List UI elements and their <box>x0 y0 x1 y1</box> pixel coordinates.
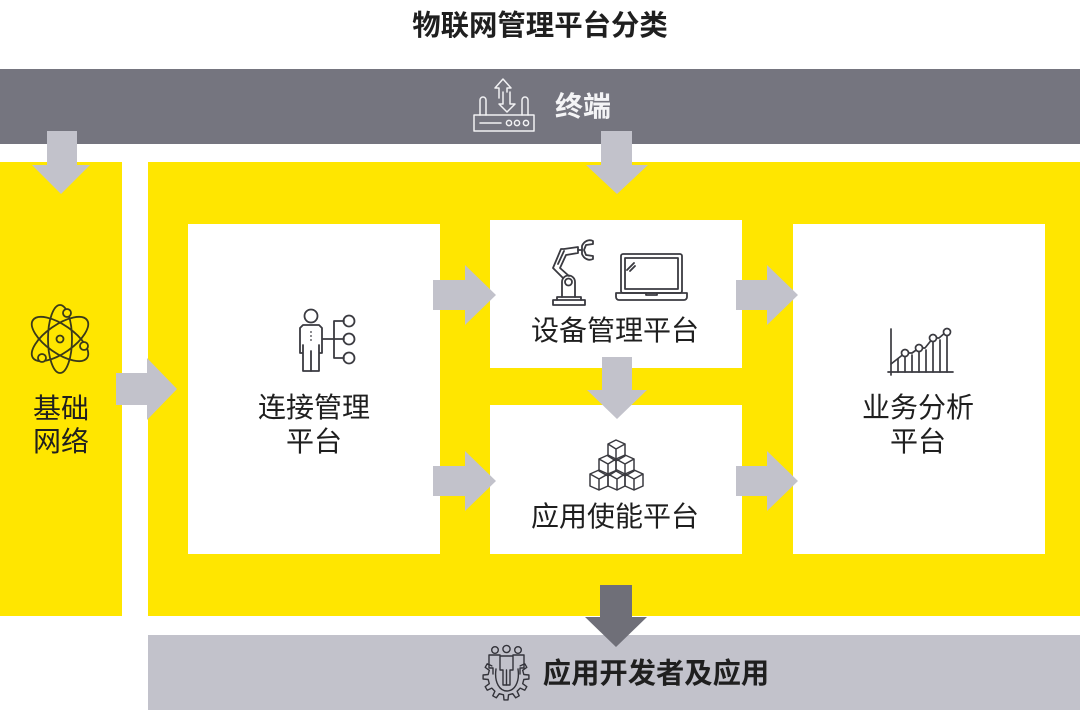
label: terminal: 终端 <box>555 91 611 122</box>
label: application enablement platform: 应用使能平台 <box>531 501 699 532</box>
panel: device platform <box>490 220 742 368</box>
panel: business analytics platform <box>793 224 1045 554</box>
arrow: device to application enablement <box>587 357 647 419</box>
arrow: base network to connectivity <box>116 358 177 420</box>
panel: connectivity platform <box>188 224 440 554</box>
label: connectivity platform: 连接管理 <box>258 392 370 423</box>
icon: robot arm <box>553 240 593 305</box>
title: 物联网管理平台分类 <box>412 9 668 42</box>
panel: terminal bar <box>0 69 1080 144</box>
panel: base network <box>0 162 122 616</box>
panel: base network: 网络 <box>33 426 89 457</box>
arrow: platforms to developers <box>585 585 647 647</box>
icon: team in gear <box>483 645 529 700</box>
icon: line chart <box>888 328 953 375</box>
arrow: terminal to platforms <box>586 131 648 194</box>
label: developers and applications: 应用开发者及应用 <box>543 657 769 689</box>
arrow: connectivity to application enablement <box>433 451 496 511</box>
label: business analytics platform: 业务分析 <box>862 392 974 423</box>
arrow: application enablement to business <box>736 451 798 511</box>
panel: connectivity platform: 平台 <box>286 426 342 457</box>
icon: laptop <box>616 254 687 300</box>
arrow: device to business <box>736 265 798 325</box>
panel: business analytics platform: 平台 <box>890 426 946 457</box>
panel: developers and applications bar <box>148 635 1080 710</box>
icon: cubes <box>590 440 643 490</box>
label: device platform: 设备管理平台 <box>531 315 699 346</box>
icon: atom <box>25 305 95 373</box>
label: base network: 基础 <box>33 393 89 424</box>
arrow: connectivity to device <box>433 265 496 325</box>
arrow: terminal to base network <box>32 131 90 194</box>
icon: person with nodes <box>300 310 354 371</box>
panel: platform area <box>148 162 1080 616</box>
panel: application enablement platform <box>490 405 742 554</box>
icon: router <box>474 79 534 131</box>
